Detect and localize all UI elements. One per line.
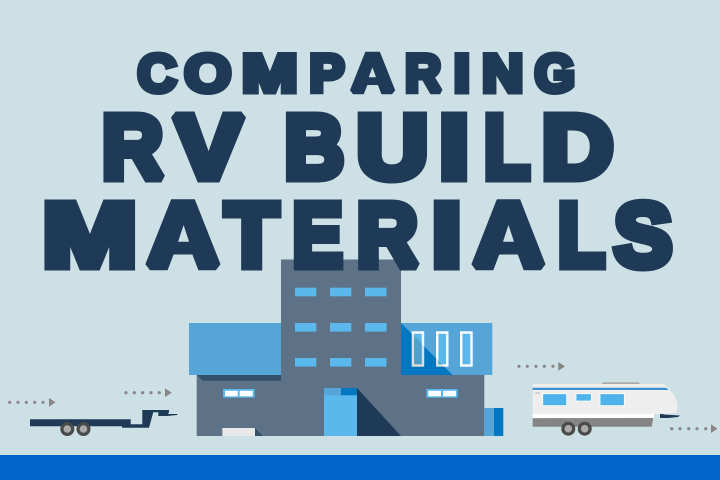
title line: RV BUILD: R [102,98,163,198]
title line: MATERIALS: A [148,186,218,286]
tower [281,260,401,436]
RV white band [533,414,654,418]
title line: COMPARING: N [482,44,523,103]
title line: RV BUILD: I [439,98,469,198]
title line: MATERIALS: I [432,186,462,286]
title line: COMPARING: P [310,44,344,103]
left lower window [223,389,255,398]
lower body [197,375,484,436]
title line: RV BUILD: D [542,98,613,198]
title line: RV BUILD: U [357,98,428,198]
arrow: left lower [8,398,56,407]
RV windows [543,394,624,406]
title line: MATERIALS: M [42,186,137,286]
arrow: left upper [124,388,172,397]
RV roof vent [602,382,640,384]
title line: MATERIALS: A [474,186,544,286]
letter A counters [178,67,514,242]
fifth wheel RV [533,382,680,436]
RV vent mark [535,392,540,394]
right lower window [426,389,458,398]
RV stripe [533,388,669,390]
RV skirt [533,418,653,427]
title line: COMPARING: R [405,44,441,103]
RV hitch [660,413,680,418]
title line: MATERIALS: R [357,186,418,286]
flatbed trailer [30,410,177,436]
trailer wheels [60,422,90,436]
left roof [189,323,281,375]
ground band [0,455,720,480]
title line: COMPARING: A [352,44,394,103]
tower windows [295,288,386,367]
title line: MATERIALS: T [225,186,278,286]
arrow: right upper [517,362,565,371]
side box [484,408,503,436]
title line: MATERIALS: L [558,186,605,286]
title line: COMPARING: O [184,44,231,103]
title line: COMPARING: G [535,44,575,103]
arrow: right lower [670,424,718,433]
title line: RV BUILD: B [284,98,344,198]
title line: MATERIALS: E [292,186,343,286]
title line: COMPARING: I [454,44,470,103]
RV wheels [561,422,592,436]
title line: RV BUILD: L [484,98,530,198]
title line: COMPARING: M [242,44,298,103]
door [324,388,401,436]
building [189,260,503,436]
title [42,44,672,286]
left roof shadow [197,375,281,381]
title line: COMPARING: C [138,44,176,103]
title line: MATERIALS: S [614,186,672,286]
right wing [401,323,492,375]
RV body [533,384,677,418]
white step [222,428,263,436]
title line: RV BUILD: V [175,98,242,198]
